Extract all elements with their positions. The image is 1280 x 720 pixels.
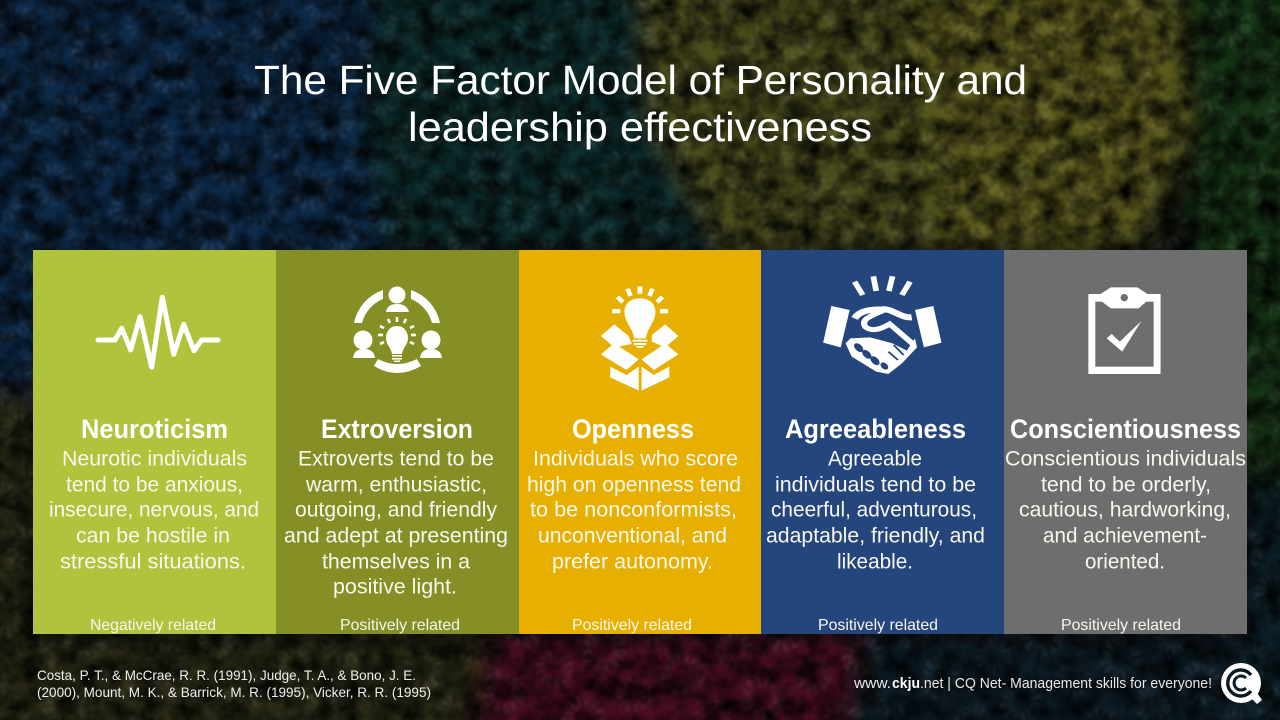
description: Neuroticism: Neurotic individuals (62, 448, 247, 470)
description: Openness: high on openness tend (527, 474, 741, 496)
description: Openness (527, 448, 741, 574)
panel: Openness (519, 250, 761, 634)
relation: positive: Positively related (340, 617, 460, 634)
description: Conscientiousness: and achievement- (1043, 524, 1207, 548)
references: (2000), Mount, M. K., & Barrick, M. R. (1995), Vicker, R. R. (1995) (37, 684, 431, 700)
description: Neuroticism: insecure, nervous, and (49, 498, 259, 522)
icon: clipboard with check mark (1088, 287, 1161, 374)
description: Extroversion: and adept at presenting (284, 524, 508, 548)
description: Agreeableness (766, 448, 985, 574)
description: Extroversion: outgoing, and friendly (295, 498, 498, 522)
relation: positive: Positively related (572, 617, 692, 634)
description: Extroversion: warm, enthusiastic, (305, 474, 487, 496)
references (37, 667, 431, 700)
description: Conscientiousness: cautious, hardworking, (1019, 498, 1231, 522)
footer credit: www. (853, 676, 891, 692)
panel: Extroversion (276, 250, 519, 634)
heading: Extroversion: Extroversion (321, 414, 473, 444)
icon: heartbeat pulse (98, 297, 218, 367)
panel: Agreeableness (761, 250, 1004, 634)
description: Conscientiousness (1005, 448, 1246, 574)
heading: Conscientiousness: Conscientiousness (1010, 414, 1241, 444)
description: Agreeableness: individuals tend to be (775, 474, 976, 496)
description: Agreeableness: adaptable, friendly, and (766, 524, 985, 548)
panel: Neuroticism (33, 250, 276, 634)
heading: Openness: Openness (572, 414, 694, 444)
relation: negative: Negatively related (90, 617, 216, 634)
description: Extroversion: themselves in a (322, 550, 470, 574)
description: Conscientiousness: tend to be orderly, (1041, 474, 1211, 496)
description: Neuroticism: tend to be anxious, (66, 474, 243, 496)
title: The Five Factor Model of Personality and (254, 57, 1027, 103)
footer credit: ckju (892, 676, 920, 692)
description: Extroversion: Extroverts tend to be (298, 448, 494, 470)
title (254, 57, 1027, 150)
heading: Neuroticism: Neuroticism (81, 414, 228, 444)
description: Agreeableness: likeable. (837, 550, 913, 574)
heading: Agreeableness: Agreeableness (785, 414, 966, 444)
description: Agreeableness: cheerful, adventurous, (771, 498, 977, 522)
description: Extroversion: positive light. (333, 576, 457, 598)
panel: Conscientiousness (1004, 250, 1247, 634)
icon: CQ logo (1221, 663, 1262, 704)
description: Neuroticism (49, 448, 259, 574)
references: Costa, P. T., & McCrae, R. R. (1991), Judge, T. A., & Bono, J. E. (37, 667, 416, 683)
description: Extroversion (284, 448, 508, 598)
relation: positive: Positively related (1061, 617, 1181, 634)
description: Openness: to be nonconformists, (530, 498, 737, 522)
relation: positive: Positively related (818, 617, 938, 634)
icon: people around a light bulb (353, 286, 442, 373)
description: Openness: prefer autonomy. (552, 550, 713, 574)
description: Neuroticism: stressful situations. (60, 550, 246, 574)
description: Openness: unconventional, and (538, 524, 727, 548)
title: leadership effectiveness (408, 104, 872, 150)
icon: light bulb rising from an open box (601, 286, 678, 391)
description: Conscientiousness: oriented. (1085, 550, 1165, 574)
icon: handshake (823, 276, 941, 374)
description: Agreeableness: Agreeable (828, 448, 922, 470)
description: Conscientiousness: Conscientious individuals (1005, 448, 1246, 470)
footer credit: .net | CQ Net- Management skills for everyone! (920, 676, 1212, 692)
description: Neuroticism: can be hostile in (76, 524, 230, 548)
description: Openness: Individuals who score (533, 448, 738, 470)
